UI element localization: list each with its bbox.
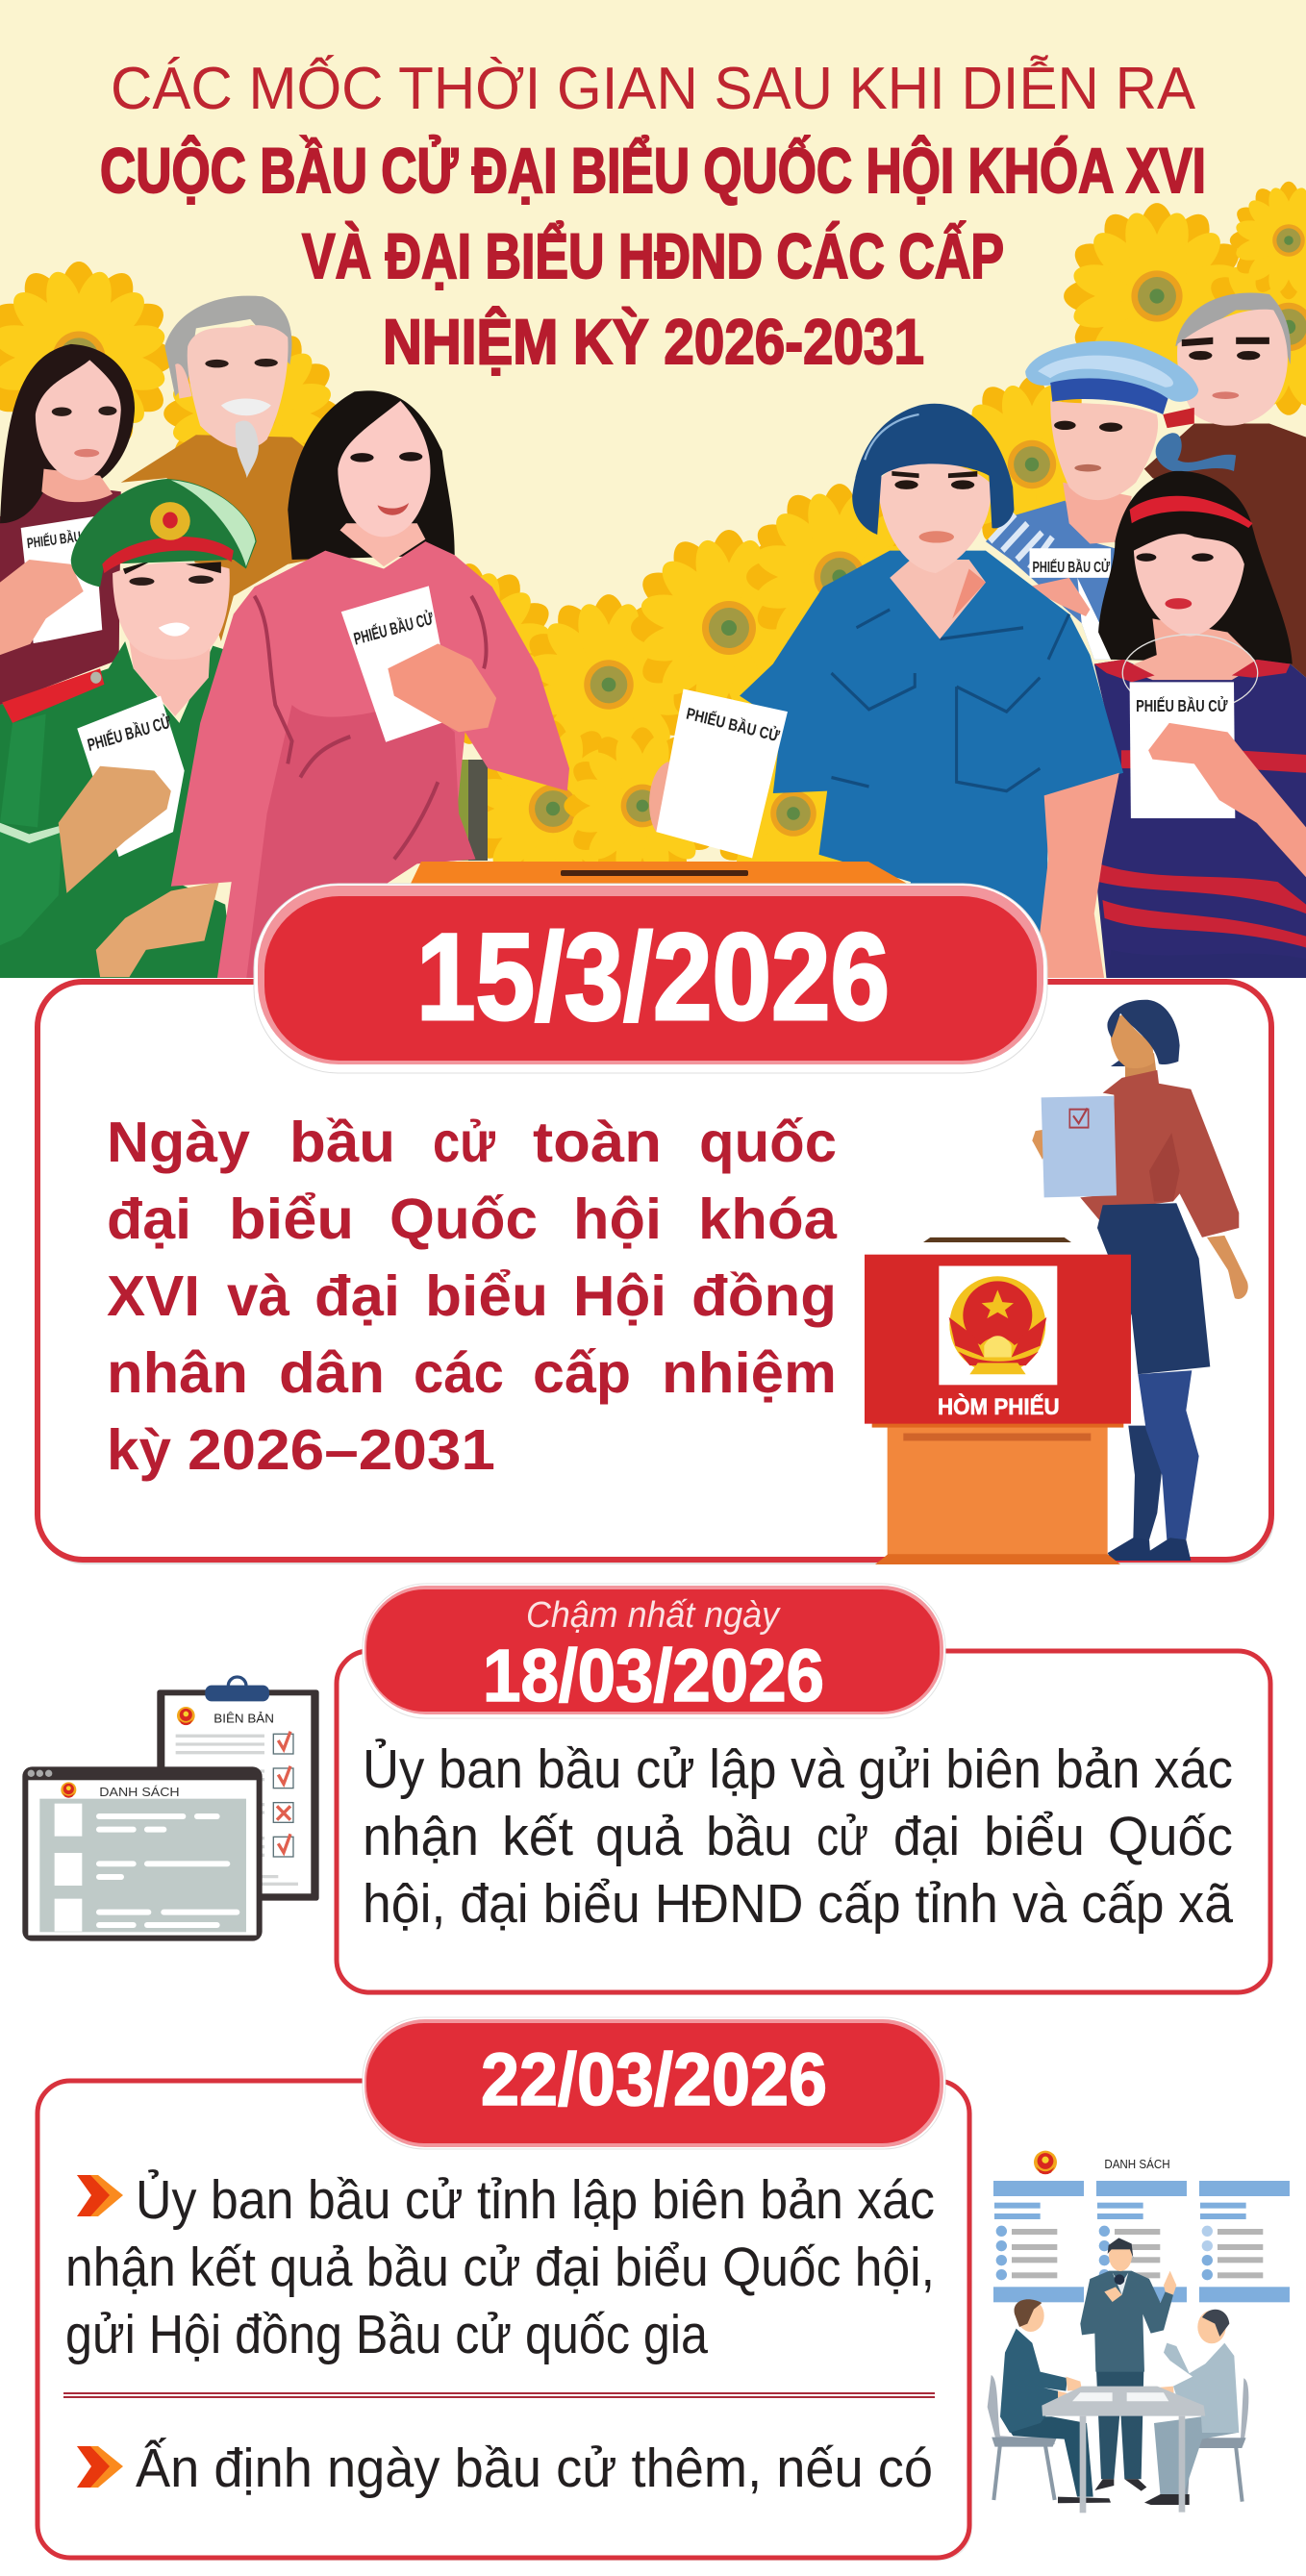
panel: 15/3/2026 [38, 982, 1274, 1564]
ethnic woman: PHIẾU BẦU CỬ [1136, 695, 1228, 715]
arrow 2 [77, 2446, 123, 2488]
panel text: bầu [289, 1111, 395, 1174]
icon: meeting with list board [988, 2151, 1290, 2513]
panel: 18/03/2026: biểu [984, 1806, 1085, 1867]
date badge: 18/03/2026 [363, 1584, 945, 1718]
title line 4: NHIỆM KỲ 2026-2031 [383, 306, 924, 377]
list window [22, 1766, 263, 1941]
man in brown [1144, 293, 1306, 678]
panel: 22/03/2026 [38, 2081, 972, 2561]
panel text: Ủy ban bầu cử lập và gửi biên bản xác [363, 1738, 1233, 1800]
divider [63, 2392, 935, 2398]
panel: 15/3/2026: nhiệm [662, 1341, 837, 1405]
paragraph 2: Ấn định ngày bầu cử thêm, nếu có [136, 2437, 933, 2499]
panel: 18/03/2026: bầu [706, 1806, 792, 1867]
ballot box: HÒM PHIẾU [938, 1393, 1060, 1419]
woman in pink ao dai [96, 390, 569, 981]
panel: 18/03/2026: cử [816, 1806, 868, 1867]
date badge: 18/03/2026: Chậm nhất ngày [526, 1595, 781, 1636]
date badge: 22/03/2026 [363, 2017, 945, 2149]
panel: 18/03/2026: đại [893, 1806, 960, 1867]
title line 3: VÀ ĐẠI BIỂU HĐND CÁC CẤP [302, 220, 1004, 291]
clipboard [157, 1677, 319, 1901]
hero illustration background [0, 0, 1306, 981]
panel text: cử [433, 1111, 495, 1174]
police officer: PHIẾU BẦU CỬ [86, 712, 173, 755]
panel: 15/3/2026: các [414, 1341, 504, 1405]
paragraph 1: Ủy ban bầu cử tỉnh lập biên bản xác [136, 2168, 935, 2231]
panel: 18/03/2026: quả [595, 1806, 683, 1867]
panel: 15/3/2026: biểu [425, 1264, 548, 1328]
panel: 15/3/2026: dân [279, 1341, 385, 1405]
panel: 15/3/2026: Hội [573, 1264, 666, 1328]
title line 1: CÁC MỐC THỜI GIAN SAU KHI DIỄN RA [111, 56, 1196, 122]
title [100, 56, 1206, 377]
national emblem [949, 1276, 1046, 1374]
date badge: 15/3/2026: 15/3/2026 [416, 909, 890, 1046]
panel: 15/3/2026: cấp [533, 1341, 631, 1405]
panel text: quốc [699, 1111, 837, 1174]
list window: DANH SÁCH [99, 1785, 180, 1799]
panel: 15/3/2026: kỳ [107, 1418, 171, 1482]
police officer [0, 479, 257, 981]
panel: 15/3/2026: Quốc [389, 1188, 538, 1251]
panel: 18/03/2026: Quốc [1108, 1806, 1233, 1867]
standing speaker [1080, 2238, 1176, 2491]
panel: 18/03/2026: kết [502, 1806, 573, 1867]
sailor: PHIẾU BẦU CỬ [1033, 559, 1110, 576]
sunflowers [0, 182, 1306, 897]
ballot box top [411, 862, 906, 883]
panel text: toàn [533, 1111, 662, 1174]
seated man left [988, 2299, 1111, 2503]
panel: 18/03/2026: hội, đại biểu HĐND cấp tỉnh và cấp xã [363, 1873, 1233, 1935]
panel: 15/3/2026: XVI [107, 1264, 200, 1328]
paragraph 1 [65, 2168, 935, 2365]
ethnic woman [1094, 471, 1306, 981]
panel: 15/3/2026: đại [314, 1264, 400, 1328]
date badge: 15/3/2026 [254, 884, 1047, 1073]
panel: 15/3/2026: đồng [691, 1264, 837, 1328]
icon: voter and ballot box [865, 1000, 1248, 1564]
icon: documents [22, 1677, 319, 1941]
list board: DANH SÁCH [1104, 2157, 1170, 2171]
date badge: 18/03/2026: 18/03/2026 [483, 1635, 824, 1717]
arrow 1 [77, 2175, 123, 2216]
panel: 15/3/2026: đại [107, 1188, 191, 1251]
soldier in blue: PHIẾU BẦU CỬ [685, 704, 782, 746]
panel: 15/3/2026: biểu [229, 1188, 354, 1251]
panel text: Ngày [107, 1111, 250, 1174]
woman in pink ao dai: PHIẾU BẦU CỬ [352, 608, 436, 649]
list board [993, 2151, 1290, 2302]
ballot box [865, 1238, 1131, 1564]
paragraph 1: nhận kết quả bầu cử đại biểu Quốc hội, [65, 2237, 935, 2298]
seated man right [1144, 2310, 1248, 2505]
panel: 15/3/2026: khóa [698, 1188, 838, 1251]
paragraph 1: gửi Hội đồng Bầu cử quốc gia [65, 2304, 708, 2365]
date badge: 22/03/2026: 22/03/2026 [481, 2038, 827, 2121]
panel: 15/3/2026: và [227, 1264, 289, 1328]
people on the left [0, 296, 569, 981]
panel: 15/3/2026: 2026–2031 [188, 1418, 495, 1482]
woman with maroon shirt [0, 344, 135, 705]
soldier in blue [649, 404, 1123, 981]
panel: 18/03/2026 [337, 1651, 1272, 1995]
voter woman [1032, 1000, 1248, 1561]
panel: 15/3/2026: nhân [107, 1341, 248, 1405]
panel: 15/3/2026: hội [573, 1188, 662, 1251]
panel: 18/03/2026: nhận [363, 1806, 479, 1867]
woman with maroon shirt: PHIẾU BẦU [26, 528, 82, 552]
clipboard: BIÊN BẢN [213, 1712, 274, 1726]
people on the right [649, 293, 1306, 981]
sailor [986, 341, 1198, 660]
table [1042, 2387, 1205, 2513]
old man with beard [121, 296, 311, 641]
